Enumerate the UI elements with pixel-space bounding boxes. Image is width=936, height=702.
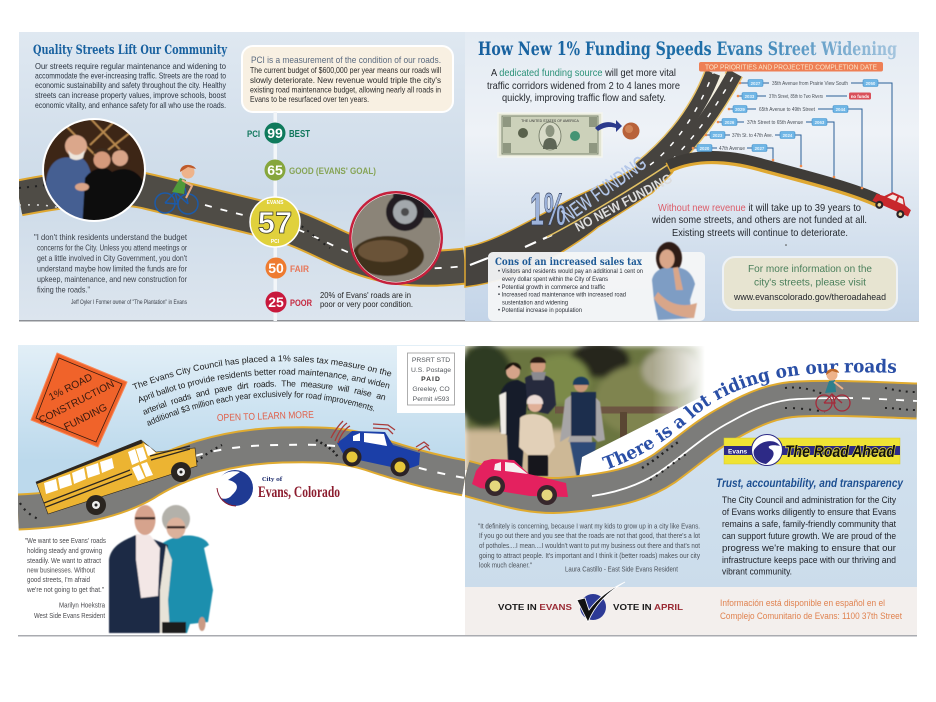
text: Spanish note: Información está disponible en español en el [720, 598, 885, 608]
text block: Castillo quote: going to attract people. It's important and I think it (better roads) makes our city [479, 551, 700, 560]
callout: PCI definition: The current budget of $600,000 per year means our roads will [250, 66, 441, 75]
text block: council measure: arterial roads and pave dirt roads. The measure will raise an [143, 380, 386, 415]
postage indicia: Permit #593 [413, 396, 450, 403]
photo: family walking [465, 346, 702, 477]
text block: Hoekstra quote [25, 536, 106, 620]
postage indicia [397, 346, 465, 413]
text block: council statement: vibrant community. [722, 566, 792, 578]
vote in April: VOTE IN APRIL [613, 602, 683, 612]
text block: council measure: The Evans City Council has placed a 1% sales tax measure on the [132, 355, 392, 390]
chart: priorities timeline: 2024 [783, 133, 793, 138]
icon: road construction sign: 1% ROAD [47, 372, 95, 403]
text block: without new revenue [651, 203, 867, 239]
callout: PCI definition: slowly deteriorate. New revenue would triple the city's [250, 76, 441, 85]
chart: priorities timeline: 2050 [866, 81, 876, 86]
text block: resident quote: "I don't think residents understand the budget [34, 232, 188, 242]
logo: City of Evans [217, 470, 340, 506]
postage indicia: U.S. Postage [411, 367, 451, 374]
chart: priorities timeline: 65th Avenue to 49th Street [759, 107, 816, 113]
logo: The Road Ahead [724, 434, 900, 466]
text block: council statement: can support future growth. We are proud of the [722, 531, 896, 542]
text block: intro: economic vitality, and enhance safety for all who use the roads. [35, 101, 226, 110]
scale: 50 fair [266, 258, 309, 278]
callout: more information: city's streets, please visit [754, 276, 866, 288]
text block: council statement: of Evans works diligently to ensure that Evans [722, 507, 896, 518]
chart: priorities timeline: 2023 [713, 133, 723, 138]
icon: red car [870, 186, 915, 221]
text block: resident quote [34, 232, 188, 306]
scale: 25 poor [266, 292, 312, 312]
scale: 57 Evans: 57 [258, 205, 292, 240]
callout: PCI definition: existing road maintenance budget, allowing nearly all roads in [250, 86, 441, 94]
photo: pothole [349, 190, 443, 285]
logo: The Road Ahead: The Road Ahead [785, 443, 896, 461]
chart: priorities timeline: 2063 [815, 120, 825, 125]
heading: quality streets: Quality Streets Lift Our Community [33, 43, 227, 58]
scale: 50 fair: 50 [268, 260, 284, 276]
text block: council statement [722, 495, 896, 578]
scale: 57 Evans [250, 197, 300, 247]
text block: Hoekstra quote: new businesses. Without [27, 566, 96, 574]
text block: Hoekstra quote: Marilyn Hoekstra [59, 600, 106, 610]
icon: child on bicycle [155, 165, 198, 214]
heading: trust: Trust, accountability, and transparency [716, 476, 904, 490]
text: no new funding: NO NEW FUNDING [572, 171, 675, 235]
icon: school bus [36, 440, 197, 515]
scale: 65 good: GOOD (EVANS' GOAL) [289, 166, 376, 177]
road: quality streets road [19, 182, 465, 268]
panel: cons of sales tax: • Increased road maintenance with increased road [498, 292, 626, 298]
panel: cons of sales tax: • Potential growth in commerce and traffic [498, 284, 605, 291]
text block: Castillo quote: If you go out there and you see that the roads are not that good, that there's a lot [479, 531, 700, 540]
road: bottom left road [18, 440, 465, 520]
panel: bottom card right [465, 346, 917, 635]
text block: Castillo quote: "It definitely is concerning, because I want my kids to grow up in a city like Evans. [478, 522, 700, 530]
text block: intro: accommodate the ever-increasing traffic. Streets are the road to [35, 72, 226, 80]
icon: dollar bill [498, 113, 602, 157]
chart: PCI scale [247, 112, 376, 321]
icon: road construction sign: CONSTRUCTION [37, 379, 116, 427]
text block: without new revenue: Existing streets will continue to deteriorate. [672, 228, 848, 239]
callout: more information [723, 257, 897, 310]
scale: 99 best [247, 122, 310, 144]
road: 1% funding road [465, 73, 878, 287]
text block: dedicated funding: A dedicated funding source will get more vital [491, 68, 676, 79]
icon: road construction sign: FUNDING [62, 402, 109, 433]
logo: The Road Ahead: Evans [728, 448, 748, 456]
logo: City of Evans: Evans, Colorado [258, 484, 340, 501]
callout: more information: For more information on the [748, 263, 872, 275]
text: 1% new funding [530, 152, 651, 235]
text block: Hoekstra quote: "We want to see Evans' roads [25, 536, 106, 545]
text block: council statement: The City Council and administration for the City [722, 495, 896, 506]
panel: cons of sales tax: every dollar spent within the City of Evans [502, 276, 608, 283]
panel: bottom card left [18, 345, 917, 636]
chart: priorities timeline: 47th Avenue [719, 146, 745, 152]
panel: cons of sales tax: • Visitors and residents would pay an additional 1 cent on [498, 268, 643, 275]
panel: cons of sales tax: • Potential increase in population [498, 307, 582, 314]
panel: cons of sales tax [488, 252, 705, 321]
text block: without new revenue: widen some streets, and others are not funded at all. [651, 215, 867, 226]
chart: priorities timeline: 37th St. to 47th Ave. [732, 133, 773, 139]
panel: top card left [19, 32, 919, 322]
footer strip [465, 582, 917, 635]
arrow: dollar to penny [595, 120, 622, 132]
text block: Castillo quote: look much cleaner." [479, 560, 532, 570]
vote in Evans: VOTE IN EVANS [498, 602, 572, 612]
banner: priorities [699, 62, 883, 72]
callout: more information: www.evanscolorado.gov/theroadahead [733, 292, 886, 303]
postage indicia: PRSRT STD [412, 357, 450, 364]
chart: priorities timeline: 2033 [745, 94, 755, 99]
callout: PCI definition: Evans to be resurfaced over ten years. [250, 95, 369, 104]
icon: road construction sign [31, 353, 127, 447]
chart: priorities timeline: 2027 [755, 146, 765, 151]
text block: dedicated funding [487, 68, 680, 104]
text: poor roads stat: poor or very poor condition. [320, 299, 413, 309]
text block: resident quote: Jeff Oyler I Former owner of "The Plantation" in Evans [71, 299, 187, 306]
text block: dedicated funding: quickly, improving traffic flow and safety. [502, 93, 666, 104]
scale: 50 fair: FAIR [290, 264, 309, 275]
chart: priorities timeline: 2020 [700, 146, 710, 151]
text: Spanish note [720, 598, 902, 621]
text block: Hoekstra quote: West Side Evans Resident [34, 611, 106, 620]
text block: resident quote: understand maybe how limited the funds are for [37, 264, 187, 274]
chart: priorities timeline: 37th Street to 65th Avenue [747, 120, 803, 126]
scale: 65 good: 65 [267, 162, 283, 178]
icon: vote check mark [577, 582, 625, 622]
text block: Castillo quote: Laura Castillo - East Side Evans Resident [565, 564, 678, 574]
callout: PCI definition: PCI is a measurement of the condition of our roads. [251, 55, 441, 66]
text block: council measure: April ballot to provide residents better road maintenance, and widen [139, 368, 390, 403]
chart: priorities timeline: 2044 [836, 107, 846, 112]
scale: 99 best: BEST [289, 129, 310, 140]
scale: 65 good [264, 160, 376, 180]
chart: priorities timeline: 2029 [735, 107, 745, 112]
text block: resident quote: fixing the roads." [37, 284, 90, 294]
scale: 25 poor: POOR [290, 298, 312, 309]
logo: City of Evans: City of [262, 477, 283, 483]
text block: council statement: progress we're making to ensure that our [722, 543, 896, 554]
chart: priorities timeline: 2026 [725, 120, 735, 125]
icon: penny [622, 122, 640, 140]
banner: priorities: TOP PRIORITIES AND PROJECTED COMPLETION DATE [705, 64, 877, 72]
photo: thinking woman [652, 242, 697, 320]
text block: intro: economic sustainability and safety throughout the city. Healthy [35, 81, 227, 90]
postage indicia: Greeley, CO [412, 386, 450, 393]
call to action: open to learn more: OPEN TO LEARN MORE [217, 410, 314, 424]
road: bottom right road [465, 387, 917, 496]
heading: riding on our roads: There is a lot riding on our roads [602, 358, 896, 469]
text: 1% new funding: 1% [530, 183, 566, 235]
text block: intro: Our streets require regular maintenance and widening to [35, 62, 226, 71]
text block: intro: streets can increase property values, improve schools, boost [35, 91, 227, 100]
icon: pink car [472, 459, 568, 505]
text block: council measure [132, 355, 392, 426]
postage indicia: PAID [421, 376, 441, 383]
text block: Castillo quote: of potholes....I mean....I wouldn't want to put my business out there and that's not [479, 541, 700, 550]
chart: priorities timeline: 2027 [751, 81, 761, 86]
text block: intro [35, 62, 227, 110]
text block: council measure: additional $3 million each year exclusively for road improvements. [147, 390, 374, 426]
scale: 57 Evans: PCI [271, 239, 280, 245]
text block: council statement: remains a safe, family-friendly community that [722, 519, 896, 530]
panel: cons of sales tax: Cons of an increased sales tax [495, 257, 643, 268]
text: poor roads stat: 20% of Evans' roads are in [320, 290, 411, 300]
text block: Hoekstra quote: we're not going to get that." [26, 585, 104, 594]
icon: child on red bicycle [816, 369, 850, 411]
text block: resident quote: get a little involved in City Government, you don't [37, 253, 188, 263]
chart: priorities timeline: no funds [851, 94, 870, 99]
chart: priorities timeline: 37th Street, 85th to Two Rivers [769, 94, 823, 100]
text: poor roads stat [320, 290, 413, 309]
icon: dollar bill: THE UNITED STATES OF AMERICA [521, 119, 579, 123]
text: 1% new funding: NEW FUNDING [558, 152, 651, 227]
text block: resident quote: concerns for the City. Unless you attend meetings or [37, 242, 187, 252]
chart: priorities timeline [692, 62, 893, 195]
scale: 25 poor: 25 [268, 294, 284, 310]
scale: 57 Evans: EVANS [267, 200, 284, 206]
text block: resident quote: upkeep, maintenance, and new construction for [37, 274, 187, 284]
text block: Hoekstra quote: holding steady and growing [27, 546, 102, 555]
text block: dedicated funding: traffic corridors widened from 2 to 4 lanes more [487, 81, 680, 92]
scale: 99 best: 99 [267, 125, 283, 141]
text: Spanish note: Complejo Comunitario de Evans: 1100 37th Street [720, 611, 902, 621]
panel: top card right [465, 32, 919, 321]
text block: council statement: infrastructure keeps pace with our thriving and [722, 555, 896, 566]
text block: Hoekstra quote: good streets, I'm afraid [27, 575, 90, 584]
scale: 99 best: PCI [247, 129, 260, 140]
text block: without new revenue: Without new revenue it will take up to 39 years to [658, 203, 861, 214]
text block: Castillo quote [478, 522, 700, 574]
chart: priorities timeline: 35th Avenue from Prairie View South [772, 81, 848, 87]
icon: blue car [331, 421, 430, 476]
panel: cons of sales tax: sustentation and widening [502, 300, 568, 306]
callout: PCI definition [242, 46, 453, 112]
photo: couple [109, 505, 213, 633]
text block: Hoekstra quote: steadily. We want to attract [27, 556, 102, 565]
photo: three residents [42, 118, 146, 222]
